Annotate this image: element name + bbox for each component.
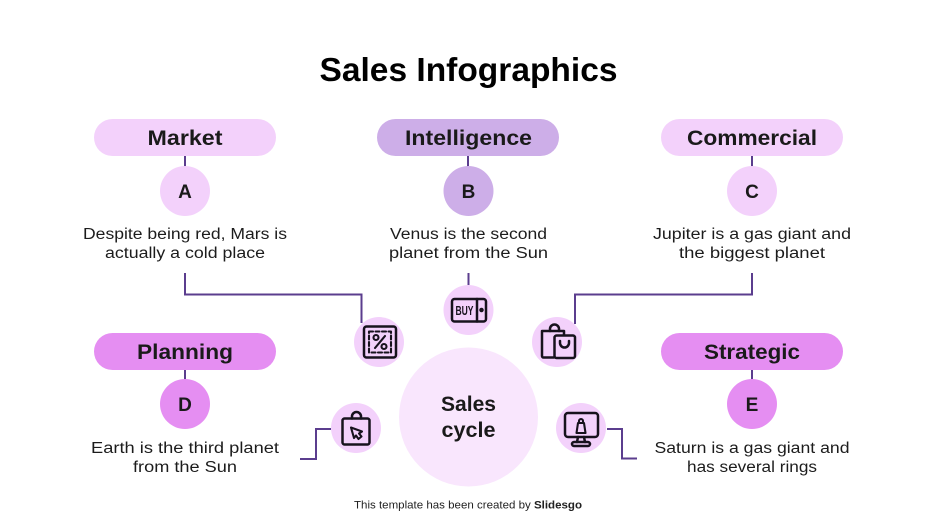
icon: monitor with bag xyxy=(556,403,606,453)
center circle: sales cycle: Sales xyxy=(441,393,496,416)
text: planning description: Earth is the third planet xyxy=(91,440,280,457)
text: commercial description: Jupiter is a gas giant and xyxy=(653,226,851,243)
connector: intelligence to buy icon xyxy=(468,273,470,285)
heading pill: market xyxy=(94,119,276,156)
connector: commercial to bags icon xyxy=(575,273,752,324)
letter badge: E xyxy=(727,379,777,429)
icon: percent coupon xyxy=(354,317,404,367)
icon: buy button xyxy=(444,285,494,335)
panel: intelligence xyxy=(377,119,559,262)
text: market description: actually a cold place xyxy=(105,245,265,262)
text: intelligence description xyxy=(389,226,548,262)
heading pill: intelligence: Intelligence xyxy=(405,127,532,150)
letter badge: A xyxy=(160,166,210,216)
letter badge: A: A xyxy=(178,182,192,203)
heading pill: planning: Planning xyxy=(137,341,233,364)
text: strategic description xyxy=(654,440,850,476)
panel: market xyxy=(83,119,287,262)
text: market description xyxy=(83,226,287,262)
heading pill: planning xyxy=(94,333,276,370)
connector: planning to cursor bag icon xyxy=(300,429,331,459)
letter badge: E: E xyxy=(746,395,758,416)
panel: planning xyxy=(91,333,280,476)
panel: strategic xyxy=(654,333,850,476)
letter badge: B xyxy=(444,166,494,216)
heading pill: strategic: Strategic xyxy=(704,341,800,364)
icon: buy button: BUY xyxy=(456,303,474,318)
heading pill: commercial xyxy=(661,119,843,156)
letter badge: B: B xyxy=(462,182,475,203)
text: intelligence description: planet from the Sun xyxy=(389,245,548,262)
icon: shopping bags xyxy=(532,317,582,367)
letter badge: D xyxy=(160,379,210,429)
text: commercial description: the biggest planet xyxy=(679,245,826,262)
title: Sales Infographics xyxy=(320,51,618,88)
text: strategic description: Saturn is a gas giant and xyxy=(654,440,850,457)
icon: bag with cursor xyxy=(331,403,381,453)
letter badge: D: D xyxy=(178,395,192,416)
connector: strategic to monitor icon xyxy=(607,429,637,458)
panel: commercial xyxy=(653,119,851,262)
text: planning description: from the Sun xyxy=(133,459,237,476)
footer credit: This template has been created by Slidesgo xyxy=(354,500,582,512)
letter badge: C xyxy=(727,166,777,216)
center circle: sales cycle: cycle xyxy=(442,419,496,442)
heading pill: strategic xyxy=(661,333,843,370)
text: strategic description: has several rings xyxy=(687,459,817,476)
center circle: sales cycle xyxy=(399,348,538,486)
text: market description: Despite being red, Mars is xyxy=(83,226,287,243)
heading pill: market: Market xyxy=(148,127,222,150)
text: planning description xyxy=(91,440,280,476)
text: commercial description xyxy=(653,226,851,262)
heading pill: commercial: Commercial xyxy=(687,127,817,150)
connector: market to coupon icon xyxy=(185,273,362,323)
letter badge: C: C xyxy=(745,182,759,203)
heading pill: intelligence xyxy=(377,119,559,156)
text: intelligence description: Venus is the second xyxy=(390,226,547,243)
